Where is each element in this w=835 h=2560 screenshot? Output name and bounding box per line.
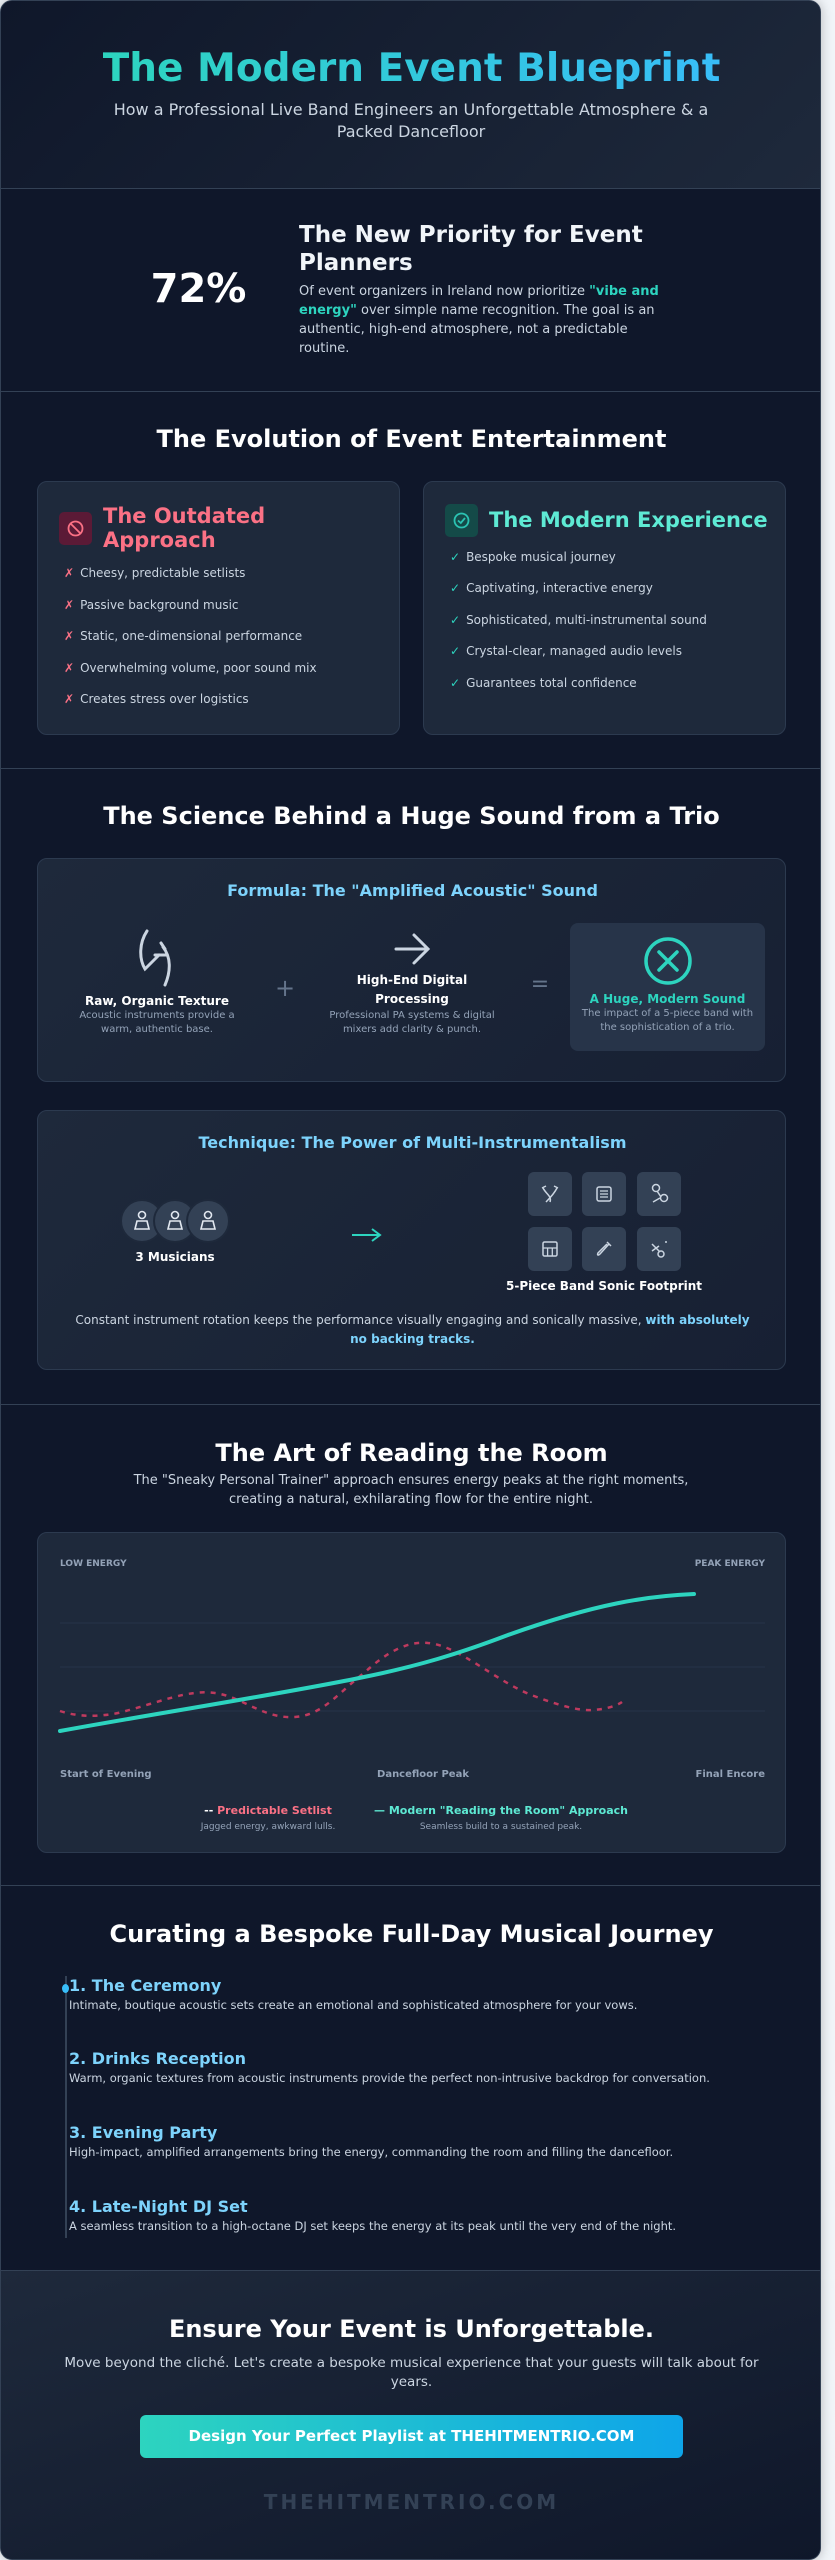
- step 1: Intimate, boutique acoustic sets create an emotional and sophisticated atmosphere for your vows.: [69, 1998, 637, 2012]
- item: raw texture: [79, 929, 235, 1035]
- list: [450, 550, 707, 690]
- item: digital processing: mixers add clarity & punch.: [343, 1024, 481, 1035]
- list: ✗ Cheesy, predictable setlists: [64, 566, 245, 580]
- cta heading: Ensure Your Event is Unforgettable.: [169, 2315, 654, 2343]
- grid label: 5-Piece Band Sonic Footprint: [506, 1279, 702, 1293]
- heading: The Evolution of Event Entertainment: [157, 425, 666, 453]
- icon: check: [445, 504, 478, 537]
- result box: A Huge, Modern Sound: [590, 992, 745, 1006]
- chart: energy curve: Final Encore: [696, 1769, 765, 1780]
- section: cta: [1, 2270, 822, 2560]
- cta text: Move beyond the cliché. Let's create a bespoke musical experience that your guests will talk about for years.: [64, 2355, 759, 2390]
- technique text: Constant instrument rotation keeps the performance visually engaging and sonically massive, with absolutely no backing tracks.: [75, 1313, 750, 1346]
- heading: The Science Behind a Huge Sound from a Trio: [103, 802, 720, 830]
- arrow: [352, 1228, 382, 1242]
- step 2: 2. Drinks Reception: [69, 2049, 246, 2068]
- button: [140, 2415, 683, 2458]
- section: evolution: [1, 391, 822, 768]
- step 3: 3. Evening Party: [69, 2123, 217, 2142]
- plus: +: [275, 974, 295, 1002]
- chart: energy curve: Jagged energy, awkward lulls.: [200, 1822, 335, 1832]
- item: digital processing: Processing: [375, 992, 449, 1006]
- chart: energy curve: — Modern "Reading the Room" Approach: [374, 1804, 628, 1817]
- title: The Modern Event Blueprint: [103, 46, 720, 91]
- panel: technique: [37, 1110, 786, 1370]
- equals: =: [531, 972, 549, 997]
- panel: outdated: [37, 481, 400, 735]
- item: raw texture: Raw, Organic Texture: [85, 994, 229, 1008]
- heading: Curating a Bespoke Full-Day Musical Journey: [110, 1920, 713, 1948]
- step 4: 4. Late-Night DJ Set: [69, 2197, 248, 2216]
- list: ✗ Static, one-dimensional performance: [64, 629, 302, 643]
- heading: The Art of Reading the Room: [215, 1439, 608, 1467]
- heading: The Outdated Approach: [103, 504, 265, 552]
- section: stat: [1, 188, 822, 391]
- section: journey: [1, 1885, 822, 2271]
- step 2: [69, 2049, 710, 2085]
- step 1: 1. The Ceremony: [69, 1976, 221, 1995]
- step 4: A seamless transition to a high-octane DJ set keeps the energy at its peak until the very end of the night.: [69, 2219, 676, 2233]
- chart: energy curve: PEAK ENERGY: [695, 1559, 765, 1569]
- list: ✗ Overwhelming volume, poor sound mix: [64, 661, 317, 675]
- subtitle: The "Sneaky Personal Trainer" approach ensures energy peaks at the right moments, creating a natural, exhilarating flow for the entire night.: [134, 1473, 688, 1507]
- item: digital processing: [329, 933, 495, 1035]
- list: ✗ Creates stress over logistics: [64, 692, 249, 706]
- list: [64, 566, 317, 706]
- chart: energy curve: [37, 1532, 786, 1853]
- chart: energy curve: Dancefloor Peak: [377, 1769, 469, 1780]
- item: raw texture: Acoustic instruments provide a: [79, 1010, 235, 1021]
- item: raw texture: warm, authentic base.: [101, 1024, 213, 1035]
- icon: forbidden: [59, 512, 92, 545]
- stat heading: The New Priority for Event Planners: [299, 222, 643, 276]
- chart: energy curve: Start of Evening: [60, 1769, 152, 1780]
- list: ✓ Crystal-clear, managed audio levels: [450, 644, 682, 658]
- chart: energy curve: -- Predictable Setlist: [204, 1804, 332, 1817]
- chart: energy curve: Seamless build to a sustained peak.: [420, 1822, 582, 1832]
- item: digital processing: Professional PA systems & digital: [329, 1010, 495, 1021]
- timeline: [62, 1976, 710, 2238]
- header: [1, 1, 822, 188]
- list: ✗ Passive background music: [64, 598, 239, 612]
- footer brand: THEHITMENTRIO.COM: [264, 2490, 559, 2514]
- list: ✓ Bespoke musical journey: [450, 550, 616, 564]
- section: reading the room: [1, 1404, 822, 1885]
- result box: The impact of a 5-piece band with: [582, 1008, 753, 1019]
- step 4: [69, 2197, 676, 2233]
- result box: [570, 923, 765, 1051]
- panel: modern: [423, 481, 786, 735]
- stat number: 72%: [151, 266, 246, 312]
- step 3: High-impact, amplified arrangements bring the energy, commanding the room and filling the dancefloor.: [69, 2145, 673, 2159]
- result box: the sophistication of a trio.: [600, 1022, 735, 1033]
- button: Design Your Perfect Playlist at THEHITMENTRIO.COM: [189, 2427, 634, 2445]
- chart: energy curve: LOW ENERGY: [60, 1559, 127, 1569]
- musicians icons: [122, 1201, 228, 1241]
- formula title: Formula: The "Amplified Acoustic" Sound: [227, 881, 598, 900]
- section: science: [1, 768, 822, 1405]
- instrument grid: [528, 1172, 681, 1271]
- item: digital processing: High-End Digital: [357, 973, 467, 987]
- step 2: Warm, organic textures from acoustic instruments provide the perfect non-intrusive backdrop for conversation.: [69, 2071, 710, 2085]
- heading: The Modern Experience: [489, 508, 768, 532]
- list: ✓ Guarantees total confidence: [450, 676, 637, 690]
- step 3: [69, 2123, 673, 2159]
- panel: formula: [37, 858, 786, 1082]
- stat text: Of event organizers in Ireland now prioritize "vibe and energy" over simple name recognition. The goal is an authentic, high-end atmosphere, not a predictable routine.: [299, 284, 659, 356]
- list: ✓ Captivating, interactive energy: [450, 581, 653, 595]
- list: ✓ Sophisticated, multi-instrumental sound: [450, 613, 707, 627]
- step 1: [69, 1976, 637, 2012]
- technique title: Technique: The Power of Multi-Instrumentalism: [198, 1133, 626, 1152]
- musicians label: 3 Musicians: [135, 1250, 215, 1264]
- subtitle: How a Professional Live Band Engineers an Unforgettable Atmosphere & a Packed Dancefloor: [114, 100, 708, 141]
